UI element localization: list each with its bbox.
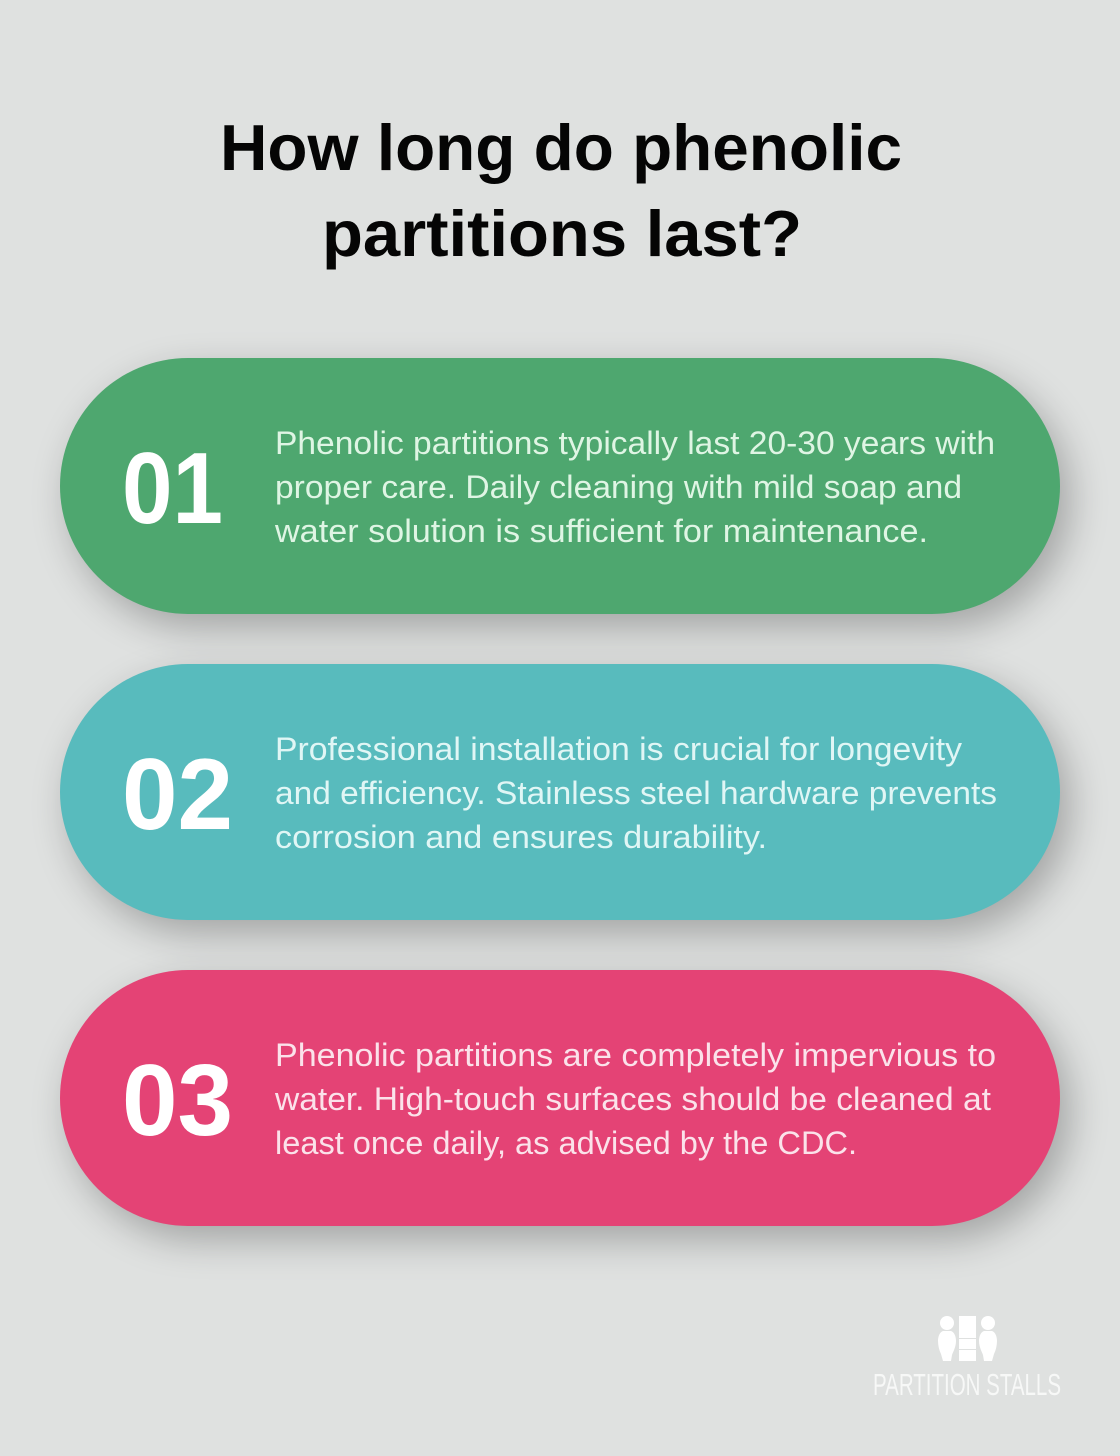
title: How long do phenolic xyxy=(220,111,902,184)
card 02 text: corrosion and ensures durability. xyxy=(275,819,767,855)
card 03 text xyxy=(274,1037,996,1161)
panel: card 01 background xyxy=(60,358,1060,614)
card 01 text xyxy=(274,425,995,549)
card 01 text: water solution is sufficient for maintenance. xyxy=(274,513,928,549)
card 03 number: 03 xyxy=(122,1045,233,1157)
card 02 text xyxy=(275,731,997,855)
card 03 text: Phenolic partitions are completely impervious to xyxy=(275,1037,996,1073)
card 02 number: 02 xyxy=(122,739,233,851)
card 02 text: Professional installation is crucial for longevity xyxy=(275,731,962,767)
panel: card 02 background xyxy=(60,664,1060,920)
panel: card 03 background xyxy=(60,970,1060,1226)
card 03 text: least once daily, as advised by the CDC. xyxy=(275,1125,857,1161)
card 01 text: proper care. Daily cleaning with mild soap and xyxy=(275,469,962,505)
card 03 text: water. High-touch surfaces should be cleaned at xyxy=(274,1081,991,1117)
card 02 text: and efficiency. Stainless steel hardware prevents xyxy=(275,775,997,811)
card 01 number: 01 xyxy=(122,433,223,545)
icon: people and partition xyxy=(938,1316,997,1361)
card 01 text: Phenolic partitions typically last 20-30 years with xyxy=(275,425,995,461)
title xyxy=(220,111,902,270)
title: partitions last? xyxy=(322,197,802,270)
logo: partition stalls xyxy=(873,1316,1061,1402)
